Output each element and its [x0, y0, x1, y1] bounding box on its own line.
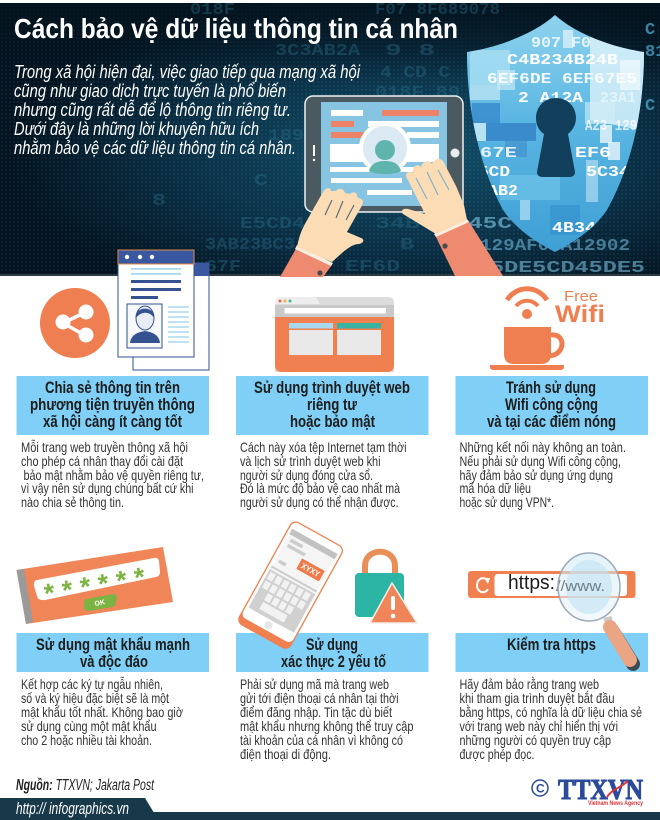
body text: sử dụng cùng một mật khẩu [21, 718, 156, 734]
intro paragraph: cũng như giao dịch trực tuyến là phổ biến [14, 80, 286, 101]
background hexadecimal characters: 4 CD C [380, 64, 450, 83]
background hexadecimal characters: 67F [205, 258, 241, 277]
icon: address bar: https: [508, 572, 555, 594]
body text: cho phép cá nhân thay đổi cài đặt [21, 453, 183, 469]
body text: số và ký hiệu đặc biệt sẽ là một [21, 690, 169, 706]
body text: Kết hợp các ký tự ngẫu nhiên, [21, 676, 163, 692]
body text: Mỗi trang web truyền thông xã hội [21, 439, 188, 455]
icon: profile documents [118, 250, 209, 370]
title: Cách bảo vệ dữ liệu thông tin cá nhân [14, 13, 458, 44]
body text: tài khoản của cá nhân vì không có [240, 732, 403, 748]
body text: nào chia sẻ thông tin. [21, 494, 124, 510]
icon: free wifi coffee cup [490, 288, 605, 370]
heading text [254, 379, 410, 431]
panel: strong password [16, 547, 209, 748]
background hexadecimal characters: 8 [152, 192, 166, 211]
background hexadecimal characters: 3C3AB2A [275, 42, 361, 61]
background hexadecimal characters: C [254, 172, 268, 191]
intro paragraph: Dưới đây là những lời khuyên hữu ích [14, 118, 259, 139]
intro paragraph: nhằm bảo vệ các dữ liệu thông tin cá nhân. [14, 137, 296, 158]
body text [460, 676, 642, 762]
heading text: xã hội càng ít càng tốt [43, 413, 182, 431]
background hexadecimal characters: 34B [375, 215, 420, 234]
icon: password card [16, 547, 173, 624]
icon: right hand and sleeve [402, 159, 503, 276]
background hexadecimal characters: E5CD4 [240, 215, 305, 234]
icon: padlock with warning [355, 552, 417, 623]
icon: security shield with keyhole: 4B34 [552, 220, 596, 237]
icon: password card: OK [94, 599, 106, 608]
heading text: Wifi công cộng [505, 396, 598, 414]
icon: security shield with keyhole: AB2 [488, 183, 518, 200]
header banner [0, 1, 660, 278]
heading text: và tại các điểm nóng [487, 413, 616, 431]
heading box [236, 376, 428, 435]
website url: http:// infographics.vn [16, 799, 129, 818]
heading text [281, 636, 386, 671]
heading text: Sử dụng [306, 636, 358, 654]
icon: magnifying glass [556, 553, 633, 664]
logo: TTXVN: Vietnam News Agency [588, 801, 644, 807]
heading text [30, 379, 195, 431]
body text [21, 676, 183, 748]
logo: TTXVN [532, 774, 644, 807]
heading box [16, 376, 209, 435]
background hexadecimal characters: F07 8F689078 [375, 1, 500, 20]
body text: Hãy đảm bảo rằng trang web [460, 676, 599, 692]
background hexadecimal characters: 018F [190, 1, 235, 20]
logo: TTXVN: C [536, 782, 545, 796]
code bubble: XYXY [299, 561, 322, 579]
body text: với trang web này chỉ hiển thị với [460, 718, 618, 734]
background hexadecimal characters: B [400, 236, 414, 255]
icon: smartphone [236, 519, 345, 651]
background hexadecimal characters: 9 8 [385, 42, 435, 61]
body text: người sử dụng đóng cửa sổ. [240, 467, 373, 483]
heading text: Sử dụng trình duyệt web [254, 379, 410, 397]
footer bar [0, 798, 660, 820]
intro paragraph [14, 61, 361, 158]
heading text: và độc đáo [80, 653, 148, 671]
icon: tablet with profile [305, 96, 463, 212]
icon: magnifying glass: //www. [556, 578, 605, 595]
body text [240, 439, 406, 510]
body text: vì vậy nên sử dụng chúng bất cứ khi [21, 480, 194, 496]
panel: private browser [236, 297, 428, 510]
background hexadecimal characters: 189 [268, 127, 304, 146]
heading text: Chia sẻ thông tin trên [45, 379, 180, 397]
body text: được phép đọc. [460, 746, 534, 762]
heading text: Kiểm tra https [507, 636, 596, 654]
icon: free wifi coffee cup: Wifi [555, 301, 605, 328]
heading box [456, 376, 648, 435]
body text [460, 439, 626, 510]
icon: address bar [468, 571, 636, 598]
body text: điện thoại di động. [240, 746, 331, 762]
heading text: riêng tư [307, 396, 357, 414]
body text: những người có quyền truy cập [460, 732, 611, 748]
panel: share less on social media [16, 250, 209, 510]
icon: security shield with keyhole [467, 15, 650, 252]
body text: gửi tới điện thoại cá nhân tại thời [240, 690, 398, 706]
heading text: phương tiện truyền thông [30, 396, 195, 414]
background hexadecimal characters: 5DE5CD45DE5 [490, 259, 645, 278]
icon: security shield with keyhole: 6EF6DE 6EF67E5 [487, 71, 637, 88]
icon: security shield with keyhole: 5CD [478, 164, 510, 181]
background hexadecimal characters: C [645, 21, 655, 40]
background hexadecimal characters: 018F 89 [375, 84, 460, 103]
body text: cho 2 hoặc nhiều tài khoản. [21, 732, 152, 748]
heading text [487, 379, 616, 431]
heading box [16, 633, 209, 672]
heading text: xác thực 2 yếu tố [281, 653, 386, 671]
icon: security shield with keyhole: EF6 [575, 145, 611, 162]
heading box [456, 633, 648, 672]
intro paragraph: nhưng cũng rất dễ để lộ thông tin riêng tư. [14, 99, 291, 120]
icon: security shield with keyhole: C4B234B24B [507, 52, 618, 69]
body text: mã hóa dữ liệu [460, 480, 531, 496]
body text: hoặc sử dụng VPN*. [460, 494, 554, 510]
background hexadecimal characters: 45C [468, 215, 512, 234]
body text [21, 439, 204, 510]
heading text [36, 636, 190, 671]
body text: hãy đảm bảo sử dụng ứng dụng [460, 467, 613, 483]
source note: Nguồn: TTXVN; Jakarta Post [16, 777, 154, 794]
icon: share [40, 288, 110, 358]
logo: TTXVN: TTXVN [558, 774, 643, 806]
background hexadecimal characters: 129AF07A12902 [480, 237, 630, 256]
intro paragraph: Trong xã hội hiện đại, việc giao tiếp qua mạng xã hội [14, 61, 361, 82]
background hexadecimal characters [152, 1, 660, 278]
panel: two factor authentication [236, 519, 428, 762]
body text: bảo mật nhằm bảo vệ quyền riêng tư, [24, 467, 204, 483]
icon: security shield with keyhole: 907 F0 [531, 35, 591, 52]
panel: avoid public wifi [456, 288, 648, 510]
background hexadecimal characters: 3AB23BC3 [205, 236, 295, 255]
heading text: hoặc bảo mật [290, 413, 375, 431]
body text: mật khẩu nhưng không thể truy cập [240, 718, 414, 734]
icon: security shield with keyhole: 5C34 [586, 164, 630, 181]
background hexadecimal characters: EF6D [345, 258, 400, 277]
icon: security shield with keyhole: 23A1 [600, 90, 636, 107]
heading text: Tránh sử dụng [506, 379, 596, 397]
icon: security shield with keyhole: A23 129 [585, 118, 637, 135]
panel: check https [456, 553, 648, 762]
keyhole [536, 98, 576, 177]
body text: Phải sử dụng mã mà trang web [240, 676, 389, 692]
background hexadecimal characters: C [645, 97, 655, 116]
body text: điểm đăng nhập. Tin tặc dù biết [240, 704, 392, 720]
icon: left hand and sleeve [280, 188, 363, 277]
icon: security shield with keyhole: 67E [480, 145, 517, 162]
body text: mật khẩu tốt nhất. Không bao giờ [21, 704, 183, 720]
body text: người sử dụng có thể nhận được. [240, 494, 398, 510]
body text [240, 676, 414, 762]
body text: Cách này xóa tệp Internet tạm thời [240, 439, 406, 455]
icon: free wifi coffee cup: Free [564, 288, 598, 305]
body text: Đó là mức độ bảo vệ cao nhất mà [240, 480, 400, 496]
icon: browser window [275, 297, 394, 372]
body text: và lịch sử trình duyệt web khi [240, 453, 380, 469]
body text: khi tham gia trình duyệt bắt đầu [460, 690, 614, 706]
profile avatar [361, 124, 409, 174]
heading text: Sử dụng mật khẩu mạnh [36, 636, 190, 654]
icon: password card: ****** [42, 562, 148, 609]
heading box [236, 633, 428, 672]
icon: security shield with keyhole: 2 A12A [518, 90, 583, 107]
